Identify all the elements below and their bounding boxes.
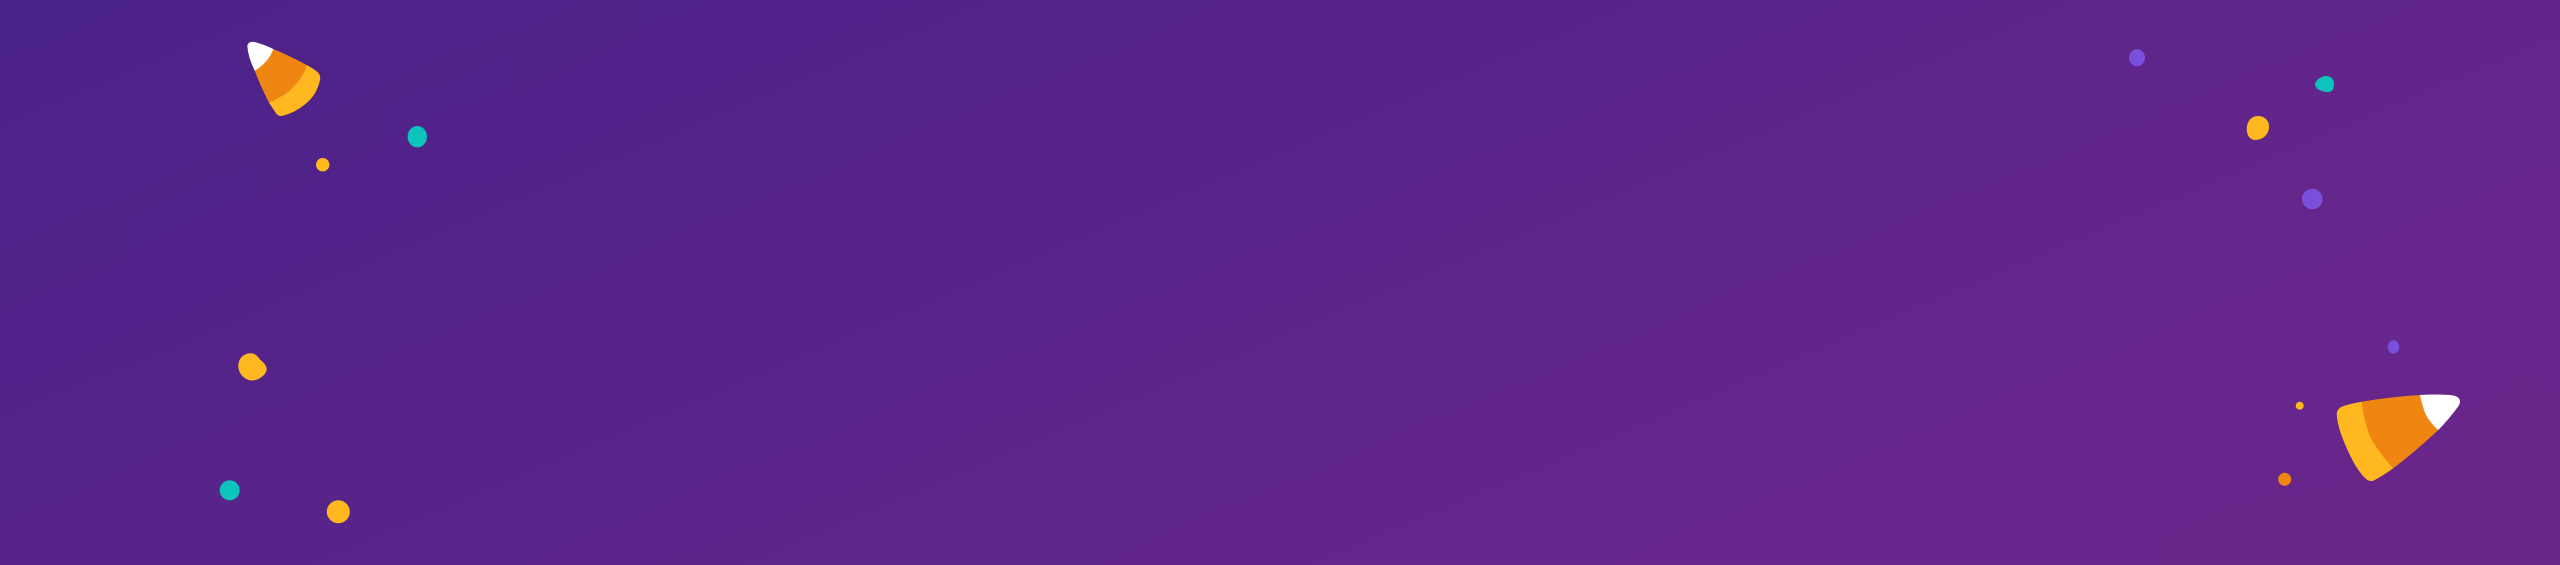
icon: yellow dot lower left xyxy=(327,500,350,523)
icon: purple dot right xyxy=(2302,189,2323,209)
icon: candy corn top left xyxy=(247,42,320,116)
icon: teal dot xyxy=(408,126,427,147)
icon: yellow blob left xyxy=(238,353,267,380)
icon: teal dot lower left xyxy=(220,480,240,500)
icon: yellow dot xyxy=(316,158,329,171)
icon: small yellow dot right xyxy=(2296,402,2304,410)
icon: orange dot right xyxy=(2278,473,2291,486)
icon: teal blob top right xyxy=(2315,76,2334,92)
icon: purple dot top right xyxy=(2129,49,2145,66)
icon: candy corn bottom right xyxy=(2337,394,2460,481)
icon: small purple dot right xyxy=(2388,340,2399,354)
icon: yellow egg top right xyxy=(2247,116,2269,140)
